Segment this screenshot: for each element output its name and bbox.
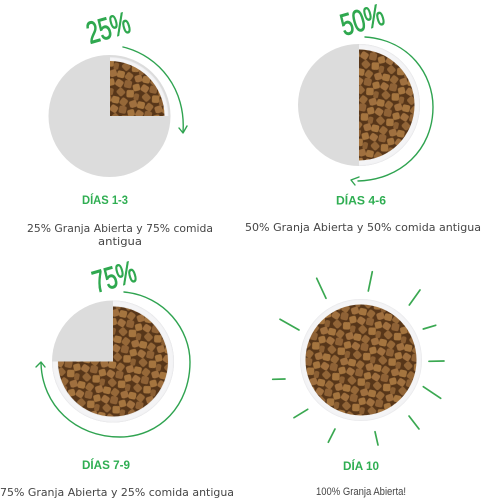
heading: DÍAS 7-9 [82, 457, 130, 472]
bowl half over grey disc [298, 44, 420, 166]
description: 75% Granja Abierta y 25% comida antigua [0, 487, 234, 499]
percentage label 75%: 75% [88, 254, 140, 300]
icon: radiating rays [273, 272, 444, 445]
description: 25% Granja Abierta y 75% comida [27, 223, 213, 235]
arrow: clockwise [123, 47, 187, 133]
heading: DÍAS 1-3 [82, 192, 128, 207]
panel: days 4-6 [245, 0, 481, 234]
bowl quarter over grey disc [48, 55, 170, 177]
bowl three quarters over grey disc [52, 300, 174, 422]
full bowl [300, 299, 422, 421]
panel: day 10 [273, 272, 444, 498]
description: antigua [98, 236, 142, 248]
description: 100% Granja Abierta! [316, 486, 406, 498]
arrow: three-quarter circle [36, 292, 190, 437]
description: 50% Granja Abierta y 50% comida antigua [245, 222, 481, 234]
panel: days 1-3 [27, 5, 213, 248]
arrow: half circle [351, 37, 433, 185]
panel: days 7-9 [0, 254, 234, 499]
heading: DÍA 10 [343, 458, 379, 473]
heading: DÍAS 4-6 [336, 192, 386, 208]
percentage label 25%: 25% [82, 5, 134, 51]
